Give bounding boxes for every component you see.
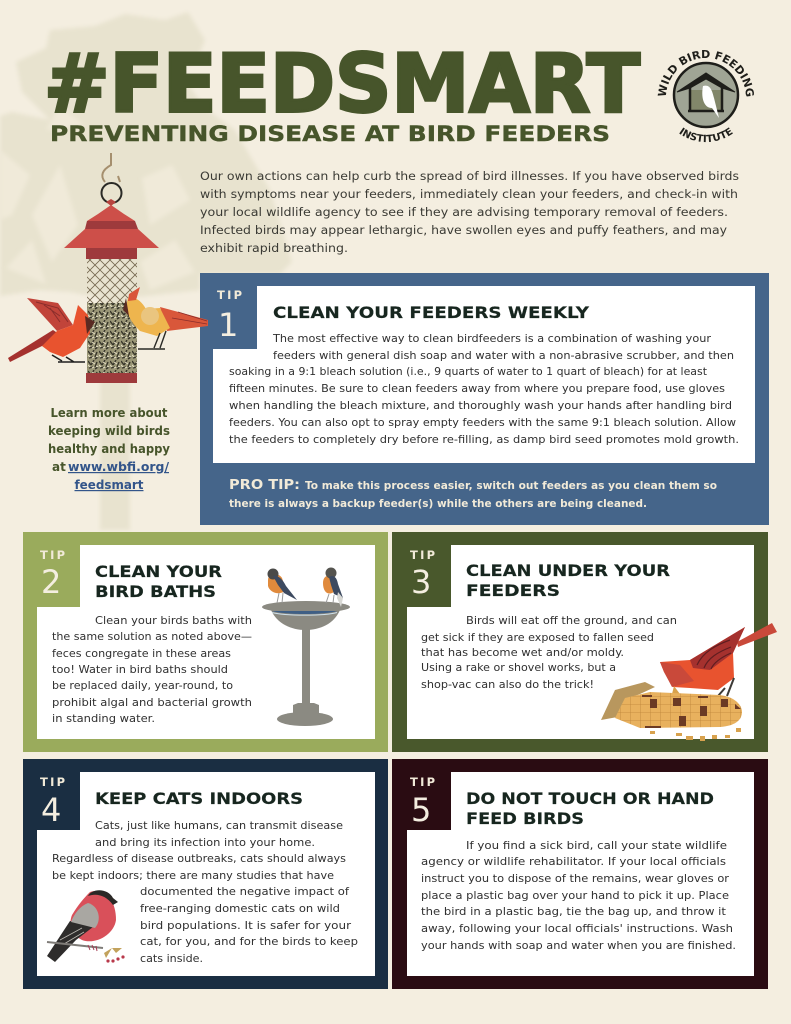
corn	[601, 682, 742, 741]
tip 2 body: prohibit algal and bacterial growth	[52, 696, 252, 709]
tip 5 body: instruct you to dispose of the remains, wear gloves or	[421, 872, 729, 885]
tip 4 body: cat, for you, and for the birds to keep	[140, 935, 358, 948]
tip 1 heading: CLEAN YOUR FEEDERS WEEKLY	[273, 304, 590, 322]
tip 3 body: Using a rake or shovel works, but a	[421, 661, 616, 674]
intro text: with symptoms near your feeders, immediately clean your feeders, and check-in with	[200, 187, 738, 201]
tip 4 body	[52, 819, 358, 965]
tip 5 body: agency or wildlife rehabilitator. If your local officials	[421, 855, 726, 868]
learn more text: at	[52, 460, 66, 474]
tip 4 body: and bring its infection into your home.	[95, 836, 315, 849]
tip 3 badge	[410, 548, 435, 601]
tip 2 body: be replaced daily, year-round, to	[52, 679, 233, 692]
tip 3 body: Birds will eat off the ground, and can	[466, 614, 677, 627]
tip 5 body: the bird in a plastic bag, tie the bag up, and throw it	[421, 905, 727, 918]
tip 2 heading: BIRD BATHS	[95, 583, 216, 601]
panel: tip 3	[392, 532, 777, 752]
tip 5 heading: FEED BIRDS	[466, 810, 584, 828]
lighter tree gaps	[0, 105, 195, 290]
background tree silhouette	[0, 12, 292, 530]
title: #FEEDSMART	[44, 38, 640, 130]
tip 2 badge: 2	[41, 563, 61, 601]
intro text: Our own actions can help curb the spread of bird illnesses. If you have observed birds	[200, 169, 739, 183]
illustration: bird feeder with cardinals	[8, 153, 208, 383]
pro tip: there is always a backup feeder(s) while the others are being cleaned.	[229, 497, 647, 510]
tip 2 badge	[40, 548, 65, 601]
tip 3 badge: TIP	[410, 548, 435, 562]
panel: tip 1	[200, 273, 769, 525]
tip 2 body: Clean your birds baths with	[95, 614, 252, 627]
pro tip: To make this process easier, switch out feeders as you clean them so	[305, 479, 717, 492]
learn more text	[48, 406, 170, 492]
tip 2 badge: TIP	[40, 548, 65, 562]
tip 5 body	[421, 839, 736, 952]
tip 1 body: fifteen minutes. Be sure to clean feeders away from where you prepare food, use gloves	[229, 382, 725, 395]
illustration: cardinal eating corn	[601, 623, 777, 741]
tip 2 body	[52, 614, 252, 725]
panel: tip 5	[392, 759, 768, 989]
tip 5 heading: DO NOT TOUCH OR HAND	[466, 790, 714, 808]
panel: tip 4	[23, 759, 388, 989]
learn more text: Learn more about	[50, 406, 168, 420]
tip 5 badge: TIP	[410, 775, 435, 789]
logo: Wild Bird Feeding Institute: WILD BIRD FEEDING	[658, 50, 754, 96]
intro text	[200, 169, 739, 255]
panel: tip 2	[23, 532, 388, 752]
red cardinal	[8, 298, 95, 362]
yellow cardinal	[123, 287, 208, 349]
tip 4 badge: 4	[41, 791, 61, 829]
learn more text: feedsmart	[74, 478, 144, 492]
tip 3 heading	[466, 562, 670, 600]
tip 1 badge: 1	[218, 306, 238, 344]
tip 3 body: get sick if they are exposed to fallen seed	[421, 631, 654, 644]
tip 3 body: shop-vac can also do the trick!	[421, 678, 594, 691]
tip 1 body: the feeders to completely dry before re-filling, as damp bird seed promotes mold growth.	[229, 433, 739, 446]
tip 4 body: Regardless of disease outbreaks, cats should always	[52, 852, 346, 865]
learn more text: healthy and happy	[48, 442, 170, 456]
tip 5 heading	[466, 790, 714, 828]
tip 4 body: be kept indoors; there are many studies that have	[52, 869, 334, 882]
intro text: exhibit rapid breathing.	[200, 241, 348, 255]
tip 4 body: bird populations. It is safer for your	[140, 919, 352, 932]
illustration: bullfinch on branch	[47, 890, 125, 963]
tip 5 body: If you find a sick bird, call your state wildlife	[466, 839, 727, 852]
tip 1 body: when handling the bleach mixture, and thoroughly wash your hands after handling bird	[229, 399, 732, 412]
intro text: Infected birds may appear lethargic, have swollen eyes and puffy feathers, and may	[200, 223, 727, 237]
logo: Wild Bird Feeding Institute	[658, 50, 754, 142]
logo: Wild Bird Feeding Institute: INSTITUTE	[679, 127, 733, 142]
tip 4 body: cats inside.	[140, 952, 203, 965]
robin right	[323, 568, 343, 607]
tip 4 body: Cats, just like humans, can transmit disease	[95, 819, 343, 832]
robin left	[268, 568, 297, 603]
intro text: your local wildlife agency to see if they are advising temporary removal of feeders.	[200, 205, 728, 219]
tip 2 heading	[95, 563, 222, 601]
tip 1 body: feeders with general dish soap and water with a non-abrasive scrubber, and then	[273, 349, 734, 362]
tip 3 body	[421, 614, 677, 691]
subtitle: PREVENTING DISEASE AT BIRD FEEDERS	[50, 122, 610, 147]
tip 2 body: too! Water in bird baths should	[52, 663, 228, 676]
tip 1 body: feeders. You can also opt to spray empty feeders with the same 9:1 bleach solution. Allow	[229, 416, 736, 429]
tip 5 badge	[410, 775, 435, 829]
tip 1 badge: TIP	[217, 288, 242, 302]
tip 2 body: in standing water.	[52, 712, 155, 725]
tip 5 body: away, following your local officials' instructions. Wash	[421, 922, 733, 935]
tip 4 badge: TIP	[40, 775, 65, 789]
tip 5 body: your hands with soap and water when you are finished.	[421, 939, 736, 952]
tip 3 heading: CLEAN UNDER YOUR	[466, 562, 670, 580]
pro tip	[229, 477, 717, 510]
tip 3 body: that has become wet and/or moldy.	[421, 646, 624, 659]
tip 4 body: documented the negative impact of	[140, 885, 350, 898]
illustration: bird bath	[262, 568, 350, 726]
tip 4 heading: KEEP CATS INDOORS	[95, 790, 303, 808]
tip 2 body: feces congregate in these areas	[52, 647, 231, 660]
learn more text: www.wbfi.org/	[68, 460, 170, 474]
tip 1 badge	[217, 288, 242, 344]
tip 1 body	[229, 332, 739, 446]
tip 3 heading: FEEDERS	[466, 582, 560, 600]
tip 3 badge: 3	[411, 563, 431, 601]
tip 4 badge	[40, 775, 65, 829]
tip 2 heading: CLEAN YOUR	[95, 563, 222, 581]
pro tip: PRO TIP:	[229, 477, 300, 493]
tip 1 body: The most effective way to clean birdfeeders is a combination of washing your	[272, 332, 711, 345]
learn more text: keeping wild birds	[48, 424, 170, 438]
tip 1 body: soaking in a 9:1 bleach solution (i.e., 9 quarts of water to 1 quart of bleach) for at least	[229, 365, 708, 378]
tip 5 badge: 5	[411, 791, 431, 829]
tip 4 body: free-ranging domestic cats on wild	[140, 902, 340, 915]
tip 2 body: the same solution as noted above—	[52, 630, 252, 643]
tip 5 body: place a plastic bag over your hand to pick it up. Place	[421, 889, 729, 902]
